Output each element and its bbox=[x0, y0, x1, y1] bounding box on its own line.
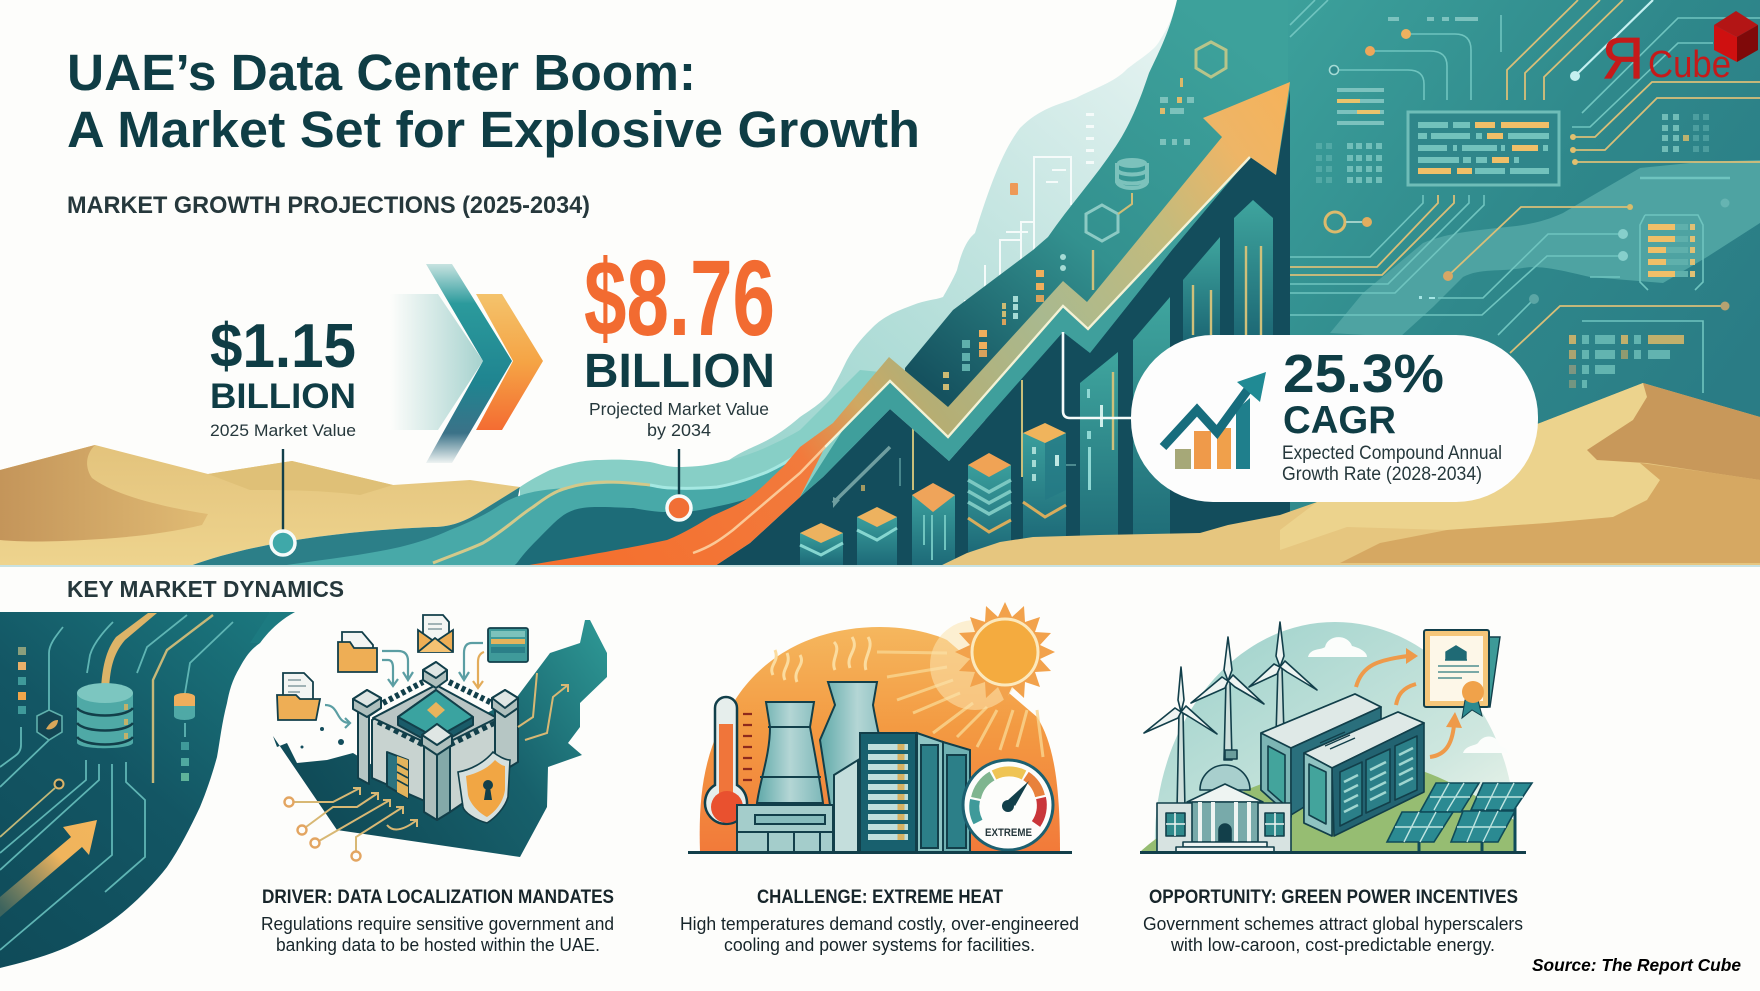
ground line bbox=[688, 851, 1072, 854]
icon: document folder top bbox=[338, 632, 377, 672]
dark strip under dune bbox=[190, 487, 520, 566]
callout: CAGR bbox=[1131, 335, 1538, 502]
status squares bbox=[18, 647, 189, 781]
iso server blocks bbox=[800, 423, 1066, 565]
icon: extreme gauge bbox=[963, 760, 1053, 850]
stat: 2025 market value: BILLION bbox=[210, 377, 356, 416]
orange incentive arrows bbox=[1356, 648, 1462, 757]
arrow peach highlight bbox=[693, 447, 825, 553]
title bbox=[67, 44, 920, 158]
callout: CAGR: 25.3% bbox=[1283, 344, 1444, 404]
driver description: Regulations require sensitive government and bbox=[261, 913, 614, 934]
icon: growth chart bbox=[1163, 372, 1266, 469]
challenge description: cooling and power systems for facilities. bbox=[724, 934, 1035, 955]
title: UAE’s Data Center Boom: bbox=[67, 44, 696, 101]
hexagon and database glyphs on teal panel bbox=[1086, 42, 1226, 241]
panel: market growth hero bbox=[0, 0, 1760, 567]
white data line bbox=[1575, 0, 1653, 76]
icon: document folder left bbox=[277, 673, 320, 720]
mid teal wave bbox=[280, 436, 815, 566]
challenge heading: CHALLENGE: EXTREME HEAT bbox=[757, 887, 1003, 908]
sky dome bbox=[1155, 622, 1514, 852]
icon: cooling towers bbox=[737, 682, 895, 852]
stat: 2034 projected value: by 2034 bbox=[647, 420, 711, 440]
callout: CAGR: Expected Compound Annual bbox=[1282, 443, 1502, 464]
circuit traces and data blocks bbox=[1290, 0, 1760, 393]
icon: fortress data center bbox=[353, 662, 518, 820]
lighter wave across board bbox=[1330, 160, 1760, 337]
panel: dark circuit corner bbox=[0, 612, 295, 968]
icon: security shield bbox=[458, 752, 510, 823]
heading: key market dynamics: KEY MARKET DYNAMICS bbox=[67, 576, 344, 602]
circuit nodes bbox=[1325, 29, 1730, 310]
icon: small shield bbox=[37, 710, 62, 740]
heading: market growth projections: MARKET GROWTH PROJECTIONS (2025-2034) bbox=[67, 192, 590, 219]
icon: government building bbox=[1157, 765, 1291, 852]
pale aqua wave bbox=[520, 370, 880, 520]
node ring bbox=[54, 780, 64, 788]
lower data grid bbox=[1569, 335, 1684, 388]
battery rows bbox=[1648, 224, 1695, 277]
icon: incentive certificate bbox=[1424, 630, 1500, 718]
icon: sun bbox=[930, 602, 1055, 710]
driver description bbox=[261, 913, 614, 955]
arrows across map bbox=[284, 673, 568, 860]
dot matrices bbox=[1316, 114, 1709, 183]
data bars bbox=[833, 200, 1273, 565]
bottom edge of hero bbox=[0, 565, 1760, 567]
icon: extreme gauge: EXTREME bbox=[985, 827, 1032, 839]
heat dome bbox=[700, 627, 1060, 852]
circuit teal panel bbox=[905, 0, 1290, 420]
logo: RCube bbox=[1602, 11, 1758, 91]
icon: server blocks bbox=[1261, 694, 1424, 836]
stat: 2025 market value: $1.15 bbox=[210, 312, 356, 381]
logo: RCube: Cube bbox=[1648, 44, 1731, 86]
green hill bbox=[1140, 759, 1514, 852]
code screen bbox=[1408, 112, 1559, 185]
arrows into fortress bbox=[325, 643, 484, 728]
icon: server racks bbox=[834, 733, 970, 852]
data stack bbox=[1337, 88, 1384, 125]
callout: CAGR: Growth Rate (2028-2034) bbox=[1282, 464, 1482, 485]
challenge description bbox=[680, 913, 1079, 955]
circuit lines bbox=[0, 615, 233, 950]
icon: thermometer bbox=[705, 697, 752, 824]
icon: database bbox=[77, 683, 133, 748]
panel top-right shoulder bbox=[250, 612, 295, 643]
arrow highlight line bbox=[825, 157, 1250, 447]
icon: server stack bbox=[488, 628, 528, 662]
opportunity description: with low-caroon, cost-predictable energy. bbox=[1170, 934, 1495, 955]
teal zigzag under arrow bbox=[800, 157, 1250, 497]
logo: RCube: Я bbox=[1602, 26, 1644, 91]
panel: opportunity bbox=[1140, 622, 1532, 955]
white skyline sketches on pale mountain bbox=[965, 113, 1094, 330]
sun rays bbox=[877, 652, 1043, 757]
opportunity heading: OPPORTUNITY: GREEN POWER INCENTIVES bbox=[1149, 887, 1518, 908]
ground line bbox=[1140, 851, 1526, 854]
icon: UAE map bbox=[273, 620, 607, 857]
challenge description: High temperatures demand costly, over-engineered bbox=[680, 913, 1079, 934]
dark mountain under the growth arrow bbox=[715, 90, 1290, 566]
accent orange block bbox=[1010, 183, 1018, 195]
right circuit board background bbox=[1288, 0, 1760, 565]
islands bbox=[300, 727, 344, 748]
icon: envelope bbox=[418, 615, 453, 652]
left dunes bbox=[0, 445, 520, 566]
callout: CAGR: CAGR bbox=[1283, 399, 1396, 442]
opportunity description bbox=[1143, 913, 1523, 955]
icon: solar panels bbox=[1387, 783, 1532, 852]
wave stripes bbox=[433, 482, 650, 563]
source note: Source: The Report Cube bbox=[1532, 955, 1741, 975]
gold rising arrow bbox=[0, 820, 97, 917]
panel: driver bbox=[261, 615, 614, 955]
icon: wind turbines bbox=[1144, 622, 1317, 810]
stat: 2034 projected value bbox=[584, 237, 775, 520]
main growth arrow bbox=[523, 82, 1290, 566]
stat: 2025 market value bbox=[210, 312, 356, 555]
driver heading: DRIVER: DATA LOCALIZATION MANDATES bbox=[262, 887, 614, 908]
opportunity description: Government schemes attract global hyperscalers bbox=[1143, 913, 1523, 934]
right dunes bbox=[940, 383, 1760, 566]
deep teal wave bbox=[503, 498, 760, 566]
title: A Market Set for Explosive Growth bbox=[67, 101, 920, 158]
stat: 2034 projected value: $8.76 bbox=[584, 237, 775, 358]
connector to CAGR bbox=[1063, 332, 1133, 418]
growth chevrons bbox=[390, 264, 543, 463]
stat: 2034 projected value: BILLION bbox=[584, 345, 775, 398]
top data ticks bbox=[1388, 17, 1478, 21]
panel: challenge bbox=[680, 602, 1079, 955]
steam bbox=[772, 637, 870, 682]
gold data stream bbox=[101, 613, 157, 690]
stat: 2034 projected value: Projected Market Value bbox=[589, 399, 769, 419]
clouds bbox=[1308, 637, 1508, 753]
stat: 2025 market value: 2025 Market Value bbox=[210, 421, 356, 440]
small floating indicators bbox=[943, 78, 1194, 390]
driver description: banking data to be hosted within the UAE. bbox=[276, 934, 600, 955]
pale teal mountain bbox=[716, 0, 1760, 565]
icon: small cylinder bbox=[174, 693, 195, 720]
